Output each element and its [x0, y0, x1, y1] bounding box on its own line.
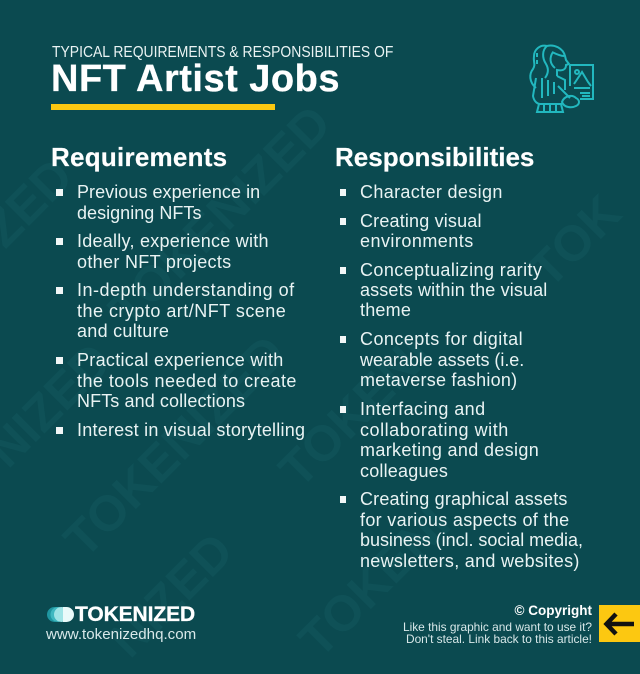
- list: responsibilities: metaverse fashion): [360, 370, 517, 390]
- list: requirements: Practical experience with: [77, 350, 284, 370]
- list: responsibilities: newsletters, and websites): [360, 551, 580, 571]
- list: requirements: [56, 182, 305, 440]
- list: responsibilities: collaborating with: [360, 420, 509, 440]
- logo: tokenized: [46, 603, 196, 643]
- list: responsibilities: Creating visual: [360, 211, 482, 231]
- list: responsibilities: Conceptualizing rarity: [360, 260, 542, 280]
- list: responsibilities: Creating graphical assets: [360, 489, 568, 509]
- title: main heading: NFT Artist Jobs: [51, 58, 340, 100]
- list: responsibilities: for various aspects of the: [360, 510, 569, 530]
- list: responsibilities: [340, 182, 583, 571]
- panel: requirements: [51, 142, 305, 440]
- copyright note: Like this graphic and want to use it?: [403, 620, 592, 634]
- heading: requirements: Requirements: [51, 142, 227, 172]
- icon: logo mark: [47, 607, 74, 622]
- list: responsibilities: marketing and design: [360, 440, 539, 460]
- list: requirements: the tools needed to create: [77, 371, 297, 391]
- list: requirements: Interest in visual storytelling: [77, 420, 305, 440]
- list: responsibilities: theme: [360, 300, 411, 320]
- website url: www.tokenizedhq.com: [46, 626, 196, 643]
- wordmark: TOKENIZED: [75, 603, 195, 626]
- list: requirements: In-depth understanding of: [77, 280, 295, 300]
- text: TOKENI: [268, 325, 441, 498]
- title: kicker: TYPICAL REQUIREMENTS & RESPONSIBILITIES OF: [52, 44, 393, 61]
- list: requirements: and culture: [77, 321, 169, 341]
- list: responsibilities: Character design: [360, 182, 503, 202]
- list: responsibilities: colleagues: [360, 461, 448, 481]
- text: NIZED: [98, 522, 244, 668]
- list: requirements: designing NFTs: [77, 203, 201, 223]
- list: responsibilities: wearable assets (i.e.: [360, 350, 524, 370]
- list: requirements: the crypto art/NFT scene: [77, 301, 286, 321]
- list: responsibilities: Concepts for digital: [360, 329, 523, 349]
- copyright note: [403, 603, 592, 646]
- icon: artist with canvas: [529, 44, 594, 113]
- list: requirements: Previous experience in: [77, 182, 260, 202]
- list: responsibilities: environments: [360, 231, 474, 251]
- panel: responsibilities: [335, 142, 583, 571]
- copyright note: Don't steal. Link back to this article!: [406, 632, 592, 646]
- text: TOKENIZED: [98, 95, 341, 338]
- list: requirements: Ideally, experience with: [77, 231, 269, 251]
- text: TOKENI: [288, 495, 461, 668]
- list: requirements: other NFT projects: [77, 252, 231, 272]
- text: TOK: [518, 184, 632, 298]
- icon: back arrow: [599, 605, 640, 642]
- list: requirements: NFTs and collections: [77, 391, 245, 411]
- list: responsibilities: assets within the visual: [360, 280, 547, 300]
- text: TOKENIZED: [53, 325, 296, 568]
- list: responsibilities: business (incl. social media,: [360, 530, 583, 550]
- copyright note: © Copyright: [515, 603, 592, 618]
- list: responsibilities: Interfacing and: [360, 399, 486, 419]
- title underline: [51, 104, 275, 110]
- heading: responsibilities: Responsibilities: [335, 142, 534, 172]
